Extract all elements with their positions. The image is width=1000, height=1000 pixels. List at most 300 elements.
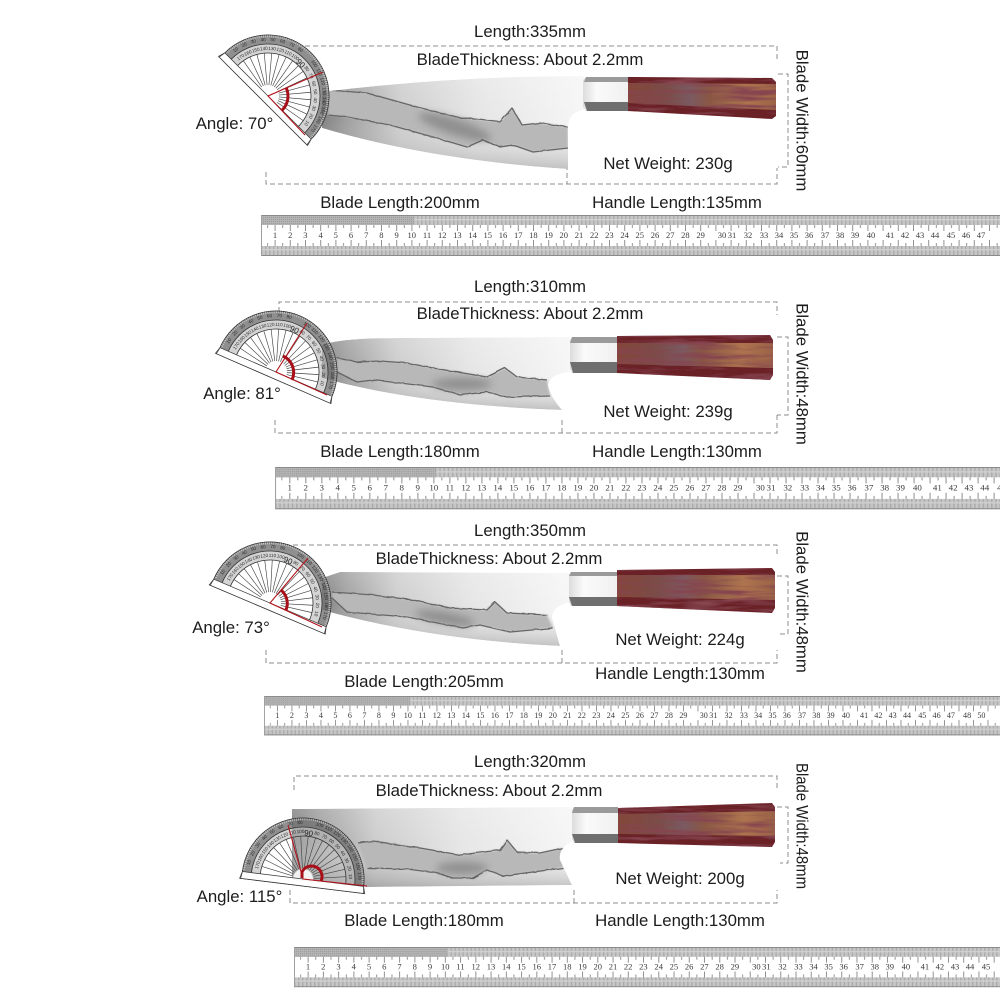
knife handle (618, 803, 775, 847)
ruler 3: 1 (275, 711, 279, 720)
ruler 3: 10 (404, 711, 412, 720)
ruler 2: 27 (701, 483, 711, 493)
ruler 4: 11 (456, 962, 465, 972)
protractor 115 degrees: 140 (266, 839, 275, 849)
ruler 2: 3 (320, 483, 325, 493)
ruler 2: 31 (766, 483, 775, 493)
panel: knife 3 specification (192, 521, 1000, 735)
protractor 73 degrees: 10 (219, 568, 226, 576)
ruler 2: 20 (589, 483, 599, 493)
ruler 4: 44 (966, 962, 975, 972)
protractor 73 degrees: 30 (314, 594, 320, 600)
ruler 4: 2 (321, 962, 325, 972)
protractor 73 degrees: 20 (315, 603, 320, 609)
ruler 4: 34 (809, 962, 819, 972)
ruler 4: 4 (352, 962, 357, 972)
ruler 3: 46 (933, 711, 941, 720)
ruler 2: 44 (980, 483, 990, 493)
protractor 70 degrees: 110 (284, 49, 293, 57)
protractor 70 degrees: 150 (251, 47, 261, 54)
ruler 4 (294, 947, 1000, 987)
labels knife 4: Net Weight: 200g (615, 869, 745, 888)
ruler 2: 32 (783, 483, 792, 493)
ruler 3 (264, 696, 1000, 735)
ruler 4: 22 (624, 962, 632, 972)
labels knife 1: Handle Length:135mm (592, 193, 762, 212)
protractor 73 degrees: 60 (260, 544, 266, 550)
protractor 81 degrees: 170 (328, 381, 334, 390)
protractor 115 degrees: 20 (249, 850, 256, 857)
ruler 1: 17 (514, 230, 522, 240)
ruler 3: 36 (783, 711, 791, 720)
protractor 73 degrees: 100 (296, 551, 306, 560)
panel: knife 1 specification (196, 8, 1000, 256)
ruler 4: 19 (578, 962, 587, 972)
protractor 70 degrees: 70 (308, 73, 315, 80)
ruler 1: 39 (851, 230, 859, 240)
ruler 4: 9 (428, 962, 432, 972)
ruler 2: 28 (717, 483, 727, 493)
ruler 3: 35 (768, 711, 777, 720)
ruler 1: 4 (318, 230, 323, 240)
protractor 81 degrees: 10 (319, 380, 325, 387)
ruler 2: 42 (949, 483, 958, 493)
ruler 2: 33 (800, 483, 810, 493)
ruler 2: 11 (445, 483, 454, 493)
ruler 4: 40 (902, 962, 910, 972)
protractor 115 degrees: 150 (261, 845, 270, 855)
protractor 81 degrees: 70 (305, 334, 313, 341)
protractor 70 degrees: 80 (297, 46, 304, 53)
protractor 115 degrees: 30 (343, 857, 350, 864)
ruler 3: 45 (918, 711, 926, 720)
protractor 115 degrees: 50 (269, 828, 276, 835)
ruler 3: 3 (304, 711, 308, 720)
ruler 1: 2 (288, 230, 292, 240)
protractor 73 degrees: 160 (231, 566, 240, 575)
ruler 2: 13 (477, 483, 487, 493)
protractor 70 degrees: 30 (250, 38, 257, 45)
ruler 1: 1 (273, 230, 277, 240)
ruler 3: 15 (476, 711, 484, 720)
labels knife 2 (203, 277, 812, 461)
ruler 1: 22 (590, 230, 598, 240)
labels knife 3: Blade Length:205mm (344, 672, 504, 691)
ruler 3: 34 (754, 711, 762, 720)
knife bolster (569, 572, 617, 606)
knife blade (322, 337, 570, 410)
ruler 3: 47 (947, 711, 955, 720)
ruler 2: 24 (653, 483, 663, 493)
protractor 81 degrees: 160 (330, 371, 335, 380)
labels knife 2: Blade Length:180mm (320, 442, 480, 461)
protractor 115 degrees: 60 (278, 824, 285, 830)
ruler 1: 34 (775, 230, 784, 240)
ruler 3: 25 (621, 711, 629, 720)
ruler 1: 47 (977, 230, 985, 240)
ruler 4: 24 (654, 962, 664, 972)
ruler 1: 14 (468, 230, 478, 240)
protractor 70 degrees: 60 (279, 38, 286, 45)
ruler 4: 32 (778, 962, 787, 972)
ruler 2: 6 (368, 483, 373, 493)
ruler 2: 17 (541, 483, 551, 493)
labels knife 1: Blade Width:60mm (792, 50, 812, 191)
protractor 70 degrees: 120 (319, 77, 326, 86)
protractor 73 degrees: 40 (312, 586, 319, 593)
ruler 1: 29 (696, 230, 705, 240)
ruler 1: 30 (718, 230, 726, 240)
ruler 4: 45 (982, 962, 990, 972)
panel: knife 2 specification (203, 277, 1000, 509)
dimension dashes (266, 545, 788, 663)
ruler 1: 20 (560, 230, 568, 240)
protractor 81 degrees: 150 (329, 361, 335, 370)
protractor 115 degrees: 100 (296, 829, 305, 834)
ruler 1: 21 (575, 230, 583, 240)
ruler 4: 25 (670, 962, 678, 972)
labels knife 1: Blade Length:200mm (320, 193, 480, 212)
protractor 70 degrees: 110 (315, 68, 323, 77)
protractor 115 degrees: 90 (304, 828, 314, 838)
protractor 73 degrees: 110 (304, 557, 313, 566)
protractor 115 degrees: 70 (321, 833, 328, 840)
protractor 115 degrees: 50 (334, 843, 342, 851)
ruler 1: 9 (394, 230, 399, 240)
labels knife 2: Handle Length:130mm (592, 442, 762, 461)
ruler 1: 16 (499, 230, 507, 240)
knife handle (617, 568, 775, 613)
dimension dashes (275, 302, 788, 433)
protractor 70 degrees: 130 (321, 87, 327, 96)
protractor 73 degrees: 90 (282, 555, 294, 567)
labels knife 4: Blade Width:48mm (792, 763, 812, 889)
labels knife 1: Net Weight: 230g (603, 154, 733, 173)
ruler 3: 18 (520, 711, 528, 720)
protractor 81 degrees: 70 (277, 313, 283, 318)
protractor 115 degrees: 20 (346, 865, 352, 872)
protractor 70 degrees: 90 (294, 57, 307, 70)
protractor 70 degrees: 130 (268, 46, 277, 52)
protractor 70 degrees: 60 (311, 81, 317, 87)
ruler 2: 36 (848, 483, 857, 493)
ruler 1: 44 (931, 230, 940, 240)
protractor 70 degrees: 40 (313, 97, 318, 103)
protractor 73 degrees: 60 (304, 571, 312, 578)
ruler 3: 39 (827, 711, 835, 720)
protractor 73 degrees: 120 (260, 553, 269, 559)
protractor 70 degrees: 140 (321, 97, 327, 105)
ruler 4: 17 (548, 962, 556, 972)
protractor 81 degrees: 160 (237, 334, 246, 344)
labels knife 2: Blade Width:48mm (792, 303, 812, 445)
protractor 70 degrees: 50 (270, 37, 276, 42)
labels knife 1: BladeThickness: About 2.2mm (417, 50, 643, 69)
protractor 70 degrees: 170 (310, 124, 319, 133)
protractor 115 degrees: 30 (254, 841, 262, 849)
dimension dashes (266, 46, 788, 184)
labels knife 3: Length:350mm (474, 521, 586, 540)
ruler 4: 21 (609, 962, 617, 972)
ruler 1: 33 (760, 230, 768, 240)
ruler 1: 31 (728, 230, 736, 240)
labels knife 1: Length:335mm (474, 22, 586, 41)
ruler 2: 34 (816, 483, 826, 493)
protractor 73 degrees: 80 (292, 560, 300, 567)
ruler 4: 33 (794, 962, 803, 972)
ruler 4: 23 (639, 962, 648, 972)
protractor 115 degrees: 80 (314, 830, 320, 837)
protractor 115 degrees: 140 (346, 844, 355, 853)
protractor 115 degrees: 110 (288, 829, 297, 836)
ruler 3: 9 (391, 711, 395, 720)
ruler 1: 41 (886, 230, 894, 240)
ruler 1: 37 (821, 230, 829, 240)
labels knife 4: Handle Length:130mm (595, 911, 765, 930)
ruler 2: 25 (669, 483, 679, 493)
labels knife 1 (196, 22, 812, 212)
ruler 3: 32 (725, 711, 733, 720)
ruler 4: 16 (532, 962, 541, 972)
protractor 115 degrees: 160 (355, 862, 361, 871)
ruler 2: 4 (336, 483, 341, 493)
ruler 1: 18 (529, 230, 538, 240)
ruler 4: 43 (951, 962, 959, 972)
protractor 81 degrees: 140 (327, 351, 334, 361)
ruler 4: 18 (563, 962, 571, 972)
ruler 1: 13 (453, 230, 462, 240)
protractor 73 degrees: 50 (250, 546, 257, 552)
ruler 2: 23 (637, 483, 647, 493)
protractor 70 degrees: 100 (291, 53, 300, 62)
protractor 81 degrees: 50 (257, 315, 264, 321)
ruler 4: 10 (441, 962, 450, 972)
ruler 4: 27 (700, 962, 709, 972)
ruler 1: 11 (423, 230, 431, 240)
ruler 4: 20 (593, 962, 602, 972)
labels knife 3 (192, 521, 812, 691)
protractor 70 degrees (219, 8, 356, 145)
labels knife 3: BladeThickness: About 2.2mm (376, 549, 602, 568)
ruler 4: 31 (762, 962, 771, 972)
ruler 4: 3 (336, 962, 341, 972)
protractor 73 degrees: 150 (237, 560, 246, 569)
protractor 73 degrees: 110 (269, 553, 277, 558)
knife handle (617, 335, 773, 380)
protractor 81 degrees: 20 (321, 372, 326, 378)
knife blade (292, 807, 572, 887)
ruler 3: 31 (709, 711, 717, 720)
ruler 2: 39 (896, 483, 906, 493)
labels knife 2: Net Weight: 239g (603, 402, 733, 421)
protractor 81 degrees: 80 (299, 329, 306, 336)
protractor 81 degrees: 140 (250, 325, 260, 333)
ruler 3: 38 (812, 711, 820, 720)
protractor 115 degrees (240, 811, 373, 894)
ruler 1: 36 (805, 230, 813, 240)
ruler 1: 8 (379, 230, 384, 240)
protractor 81 degrees: 120 (317, 334, 326, 343)
protractor 115 degrees: 80 (297, 820, 303, 825)
ruler 3: 4 (319, 711, 323, 720)
ruler 3: 44 (903, 711, 911, 720)
knife bolster (570, 337, 617, 373)
protractor 73 degrees: 40 (241, 549, 248, 556)
protractor 73 degrees: 170 (322, 611, 328, 620)
dimension dashes (290, 776, 788, 903)
ruler 2: 19 (573, 483, 583, 493)
protractor 73 degrees: 50 (309, 578, 316, 585)
protractor 81 degrees: 60 (311, 340, 318, 348)
ruler 4: 8 (413, 962, 417, 972)
ruler 1: 26 (651, 230, 659, 240)
ruler 2: 41 (933, 483, 942, 493)
protractor 81 degrees: 150 (243, 329, 253, 338)
ruler 2: 30 (756, 483, 765, 493)
ruler 3: 30 (700, 711, 708, 720)
ruler 4: 15 (517, 962, 526, 972)
protractor 70 degrees: 100 (310, 59, 319, 69)
protractor 73 degrees: 140 (320, 582, 328, 591)
ruler 2: 38 (880, 483, 890, 493)
protractor 70 degrees: 150 (319, 106, 326, 115)
ruler 4: 7 (397, 962, 402, 972)
ruler 3: 8 (377, 711, 381, 720)
protractor 81 degrees: 100 (283, 322, 292, 329)
ruler 3: 7 (362, 711, 366, 720)
labels knife 2: Angle: 81° (203, 384, 281, 403)
ruler 2: 40 (913, 483, 922, 493)
labels knife 2: Length:310mm (474, 277, 586, 296)
ruler 3: 20 (549, 711, 557, 720)
ruler 1: 32 (744, 230, 752, 240)
ruler 3: 41 (860, 711, 868, 720)
ruler 2: 26 (685, 483, 695, 493)
ruler 4: 30 (752, 962, 761, 972)
protractor 70 degrees: 30 (311, 105, 317, 112)
knife bolster (583, 77, 628, 111)
protractor 81 degrees: 80 (286, 314, 293, 320)
protractor 73 degrees: 20 (225, 561, 233, 568)
protractor 70 degrees: 160 (243, 49, 253, 57)
ruler 2: 5 (352, 483, 357, 493)
ruler 2: 9 (416, 483, 421, 493)
ruler 2: 21 (605, 483, 614, 493)
ruler 4: 42 (936, 962, 944, 972)
protractor 73 degrees: 70 (299, 565, 306, 572)
ruler 1: 19 (544, 230, 553, 240)
ruler 2: 12 (461, 483, 470, 493)
protractor 81 degrees: 50 (315, 347, 322, 355)
protractor 115 degrees: 130 (340, 836, 349, 845)
ruler 3: 33 (740, 711, 748, 720)
ruler 4: 37 (855, 962, 864, 972)
protractor 115 degrees: 40 (261, 834, 268, 841)
protractor 70 degrees: 10 (232, 46, 239, 53)
protractor 115 degrees: 40 (339, 850, 347, 857)
ruler 2: 7 (384, 483, 389, 493)
protractor 115 degrees: 10 (348, 874, 353, 880)
protractor 70 degrees: 20 (241, 41, 248, 48)
ruler 3: 40 (842, 711, 850, 720)
ruler 1: 24 (620, 230, 630, 240)
ruler 4: 36 (839, 962, 848, 972)
ruler 4: 39 (886, 962, 894, 972)
panel: knife 4 specification (197, 752, 1000, 987)
ruler 1: 38 (836, 230, 844, 240)
protractor 70 degrees: 80 (303, 65, 311, 73)
ruler 1 (261, 215, 1000, 256)
ruler 3: 29 (679, 711, 687, 720)
labels knife 3: Handle Length:130mm (595, 664, 765, 683)
ruler 4: 29 (731, 962, 739, 972)
ruler 4: 35 (824, 962, 833, 972)
protractor 73 degrees: 70 (270, 544, 276, 549)
labels knife 4: Length:320mm (474, 752, 586, 771)
ruler 3: 37 (798, 711, 806, 720)
ruler 3: 22 (578, 711, 586, 720)
ruler 1: 25 (636, 230, 644, 240)
ruler 4: 5 (367, 962, 371, 972)
ruler 3: 5 (333, 711, 337, 720)
ruler 3: 12 (433, 711, 441, 720)
protractor 115 degrees: 170 (254, 860, 261, 870)
protractor 81 degrees: 10 (225, 337, 233, 344)
labels knife 3: Angle: 73° (192, 618, 270, 637)
ruler 2: 14 (493, 483, 503, 493)
labels knife 4: Angle: 115° (197, 887, 282, 906)
protractor 70 degrees: 140 (260, 46, 268, 52)
protractor 115 degrees: 150 (351, 852, 359, 862)
ruler 4: 41 (921, 962, 929, 972)
ruler 3: 13 (447, 711, 455, 720)
protractor 81 degrees: 30 (320, 364, 326, 370)
ruler 1: 35 (790, 230, 798, 240)
ruler 3: 21 (563, 711, 571, 720)
protractor 115 degrees: 120 (332, 830, 342, 838)
ruler 1: 10 (408, 230, 416, 240)
ruler 1: 28 (681, 230, 690, 240)
ruler 3: 50 (977, 711, 985, 720)
protractor 81 degrees: 30 (239, 323, 246, 330)
protractor 73 degrees: 130 (316, 573, 325, 582)
protractor 81 degrees: 120 (266, 322, 275, 328)
labels knife 2: BladeThickness: About 2.2mm (417, 304, 643, 323)
protractor 115 degrees: 120 (280, 831, 289, 839)
ruler 3: 6 (348, 711, 352, 720)
protractor 115 degrees: 170 (357, 872, 362, 880)
ruler 1: 6 (349, 230, 353, 240)
ruler 4: 38 (870, 962, 879, 972)
protractor 70 degrees: 50 (313, 89, 318, 95)
ruler 1: 12 (438, 230, 446, 240)
ruler 4: 28 (715, 962, 724, 972)
protractor 70 degrees: 170 (236, 53, 246, 61)
ruler 3: 19 (534, 711, 542, 720)
protractor 73 degrees: 30 (232, 554, 240, 561)
protractor 73 degrees: 150 (323, 592, 329, 601)
protractor 115 degrees: 10 (246, 859, 252, 866)
ruler 4: 12 (471, 962, 480, 972)
protractor 81 degrees: 40 (318, 355, 325, 362)
labels knife 4: Blade Length:180mm (344, 911, 504, 930)
protractor 70 degrees: 70 (288, 41, 296, 48)
ruler 3: 17 (505, 711, 513, 720)
protractor 81 degrees: 130 (258, 323, 267, 330)
protractor 73 degrees: 10 (313, 611, 319, 617)
protractor 81 degrees: 110 (310, 327, 320, 336)
ruler 4: 6 (382, 962, 386, 972)
